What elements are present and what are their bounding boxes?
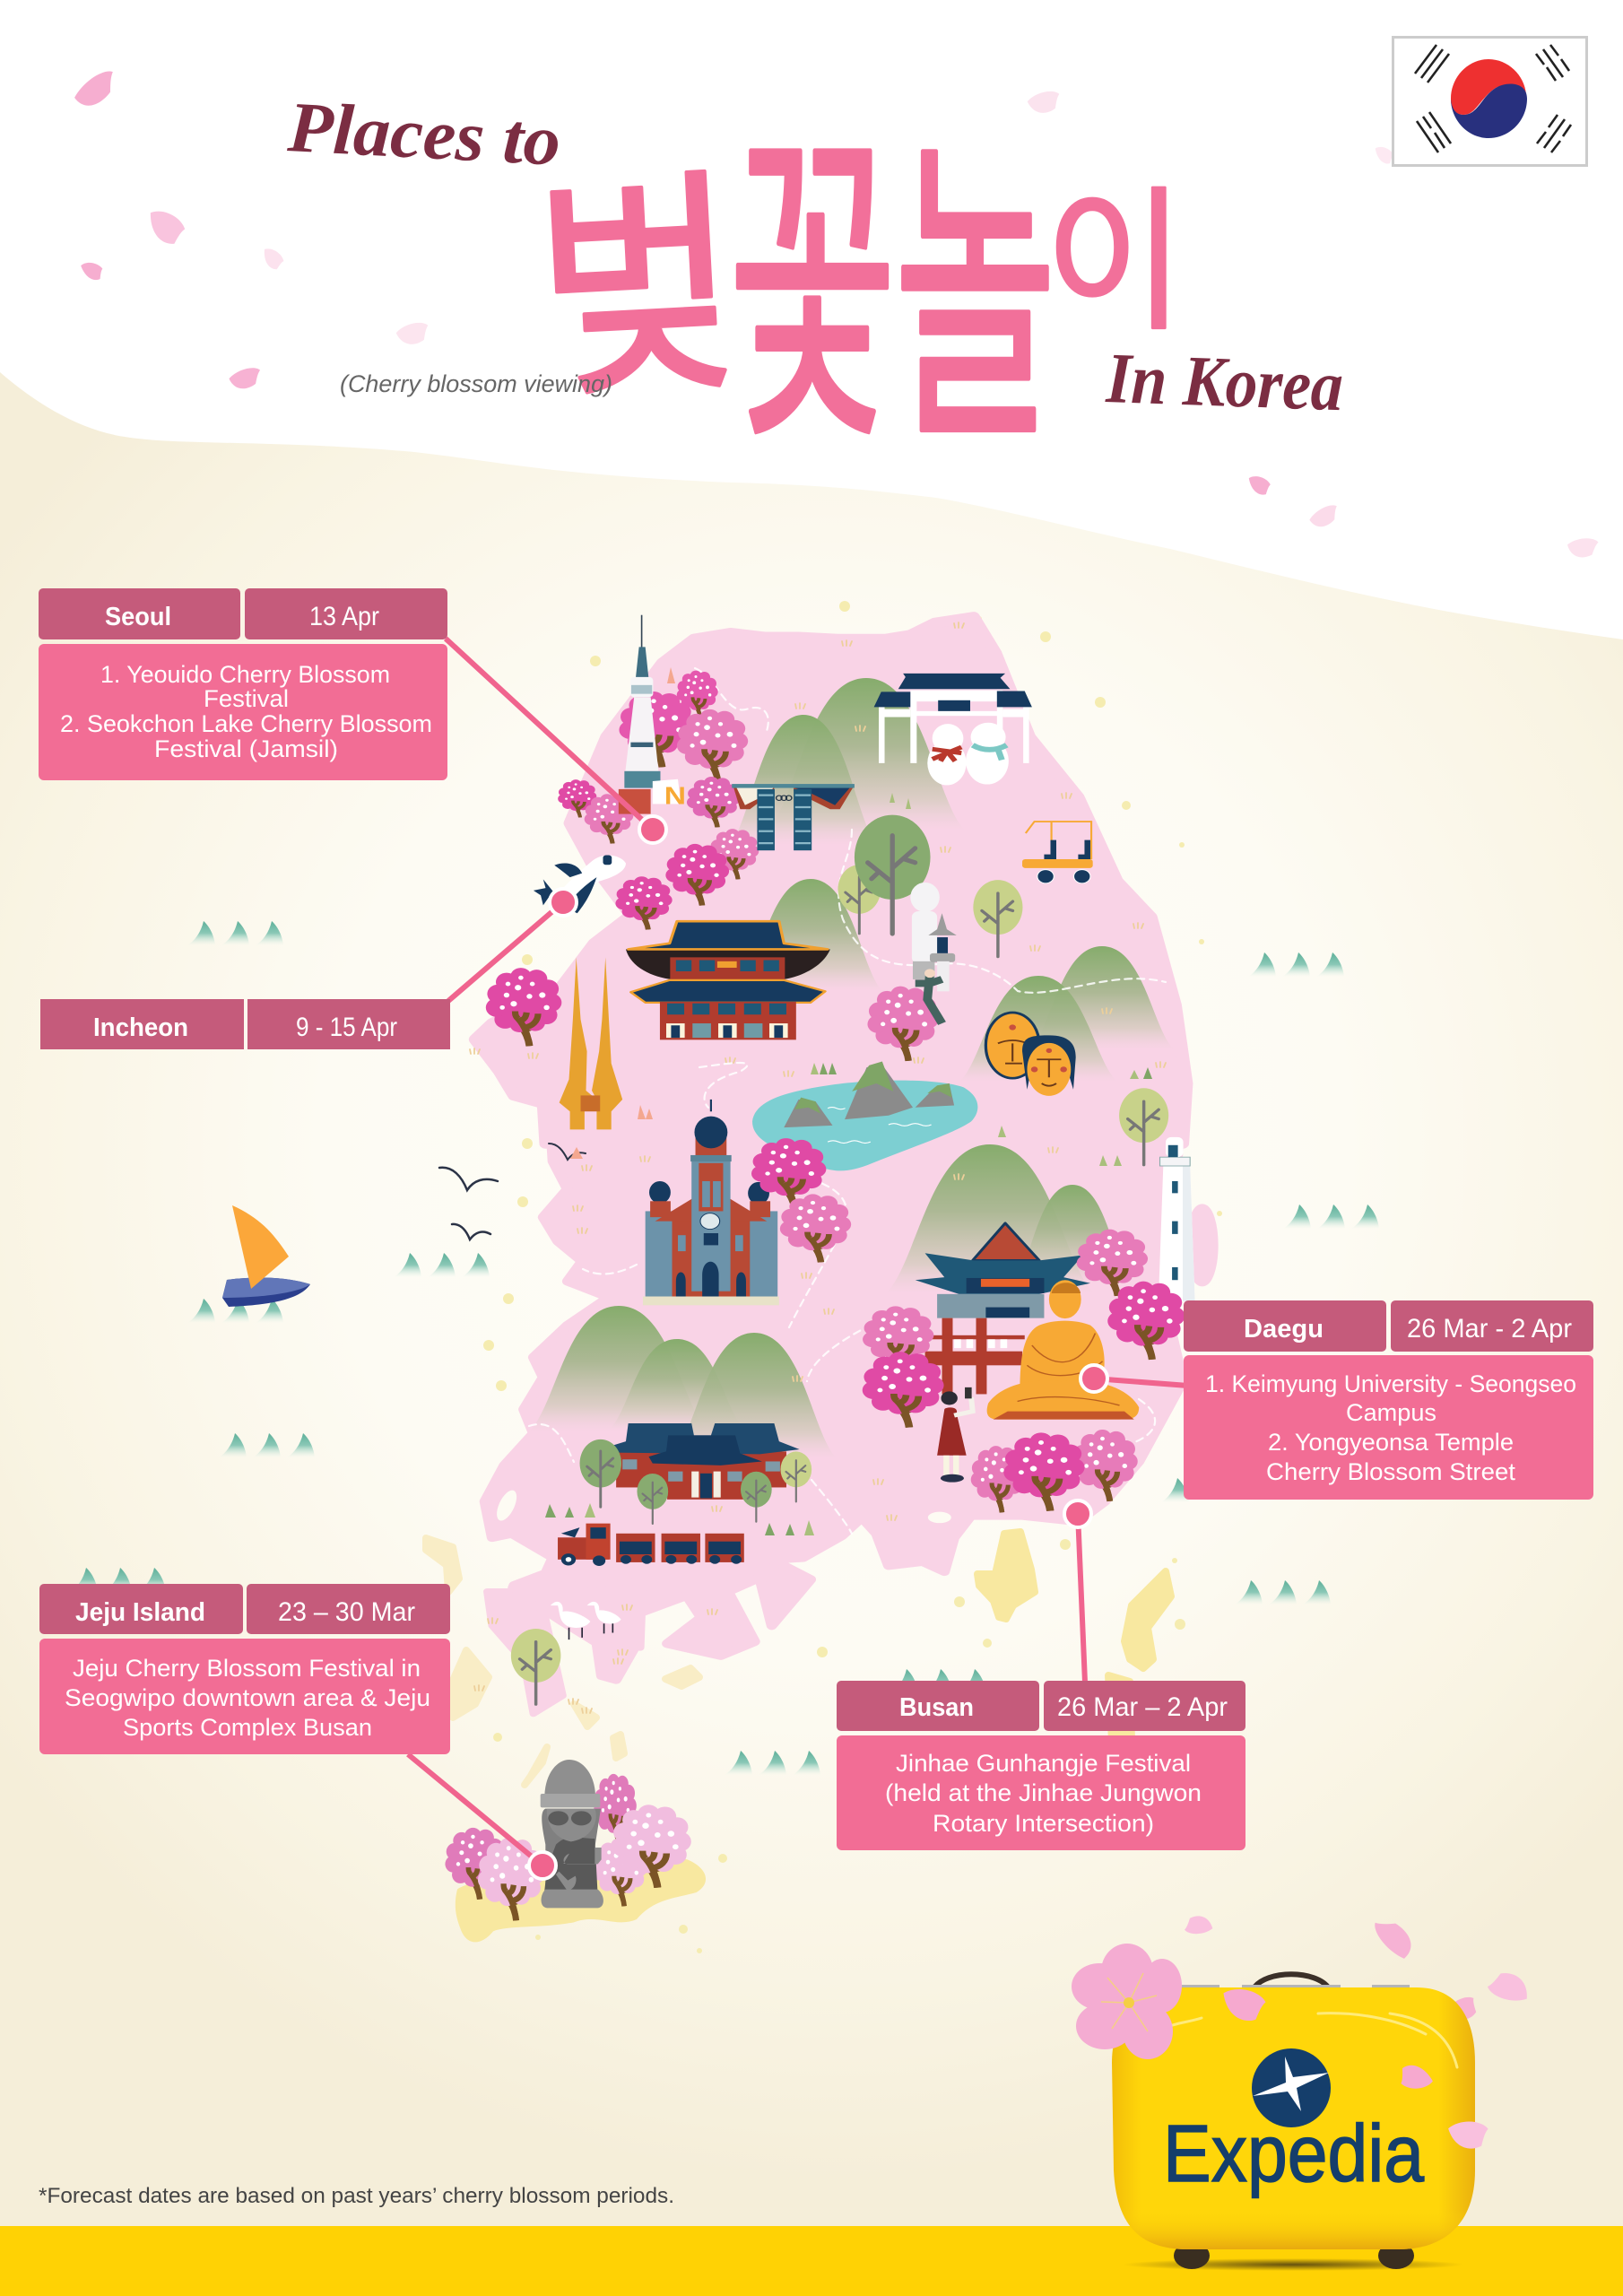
green trees <box>838 815 1168 1165</box>
map of South Korea <box>475 617 1186 1144</box>
icon: Olympic gate <box>732 784 855 850</box>
yellow island shapes <box>426 1532 1171 1785</box>
icon: hanok complex with trees <box>580 1423 812 1524</box>
panel: Seoul <box>39 588 447 780</box>
title: Korean headline: 이 <box>1045 136 1185 361</box>
panel: Daegu <box>1184 1300 1593 1500</box>
icon: gate with snowmen <box>874 674 1032 785</box>
scattered yellow dots <box>483 601 1222 1953</box>
map: coastal islets <box>487 1207 1214 1714</box>
title: Places to: Places to <box>285 88 562 181</box>
connector lines <box>408 639 1188 1866</box>
panel: Seoul: Festival <box>204 685 289 712</box>
panel: Busan: Rotary Intersection) <box>933 1810 1154 1837</box>
subtitle: Cherry blossom viewing: (Cherry blossom viewing) <box>340 370 612 397</box>
panel: Daegu: Cherry Blossom Street <box>1266 1458 1515 1485</box>
panel: Jeju Island <box>39 1584 450 1754</box>
icon: seagulls <box>439 1144 586 1239</box>
decorative sea waves <box>70 921 1379 1775</box>
small triangles on map <box>545 667 1152 1535</box>
icon: stone Buddha and pagoda <box>910 883 957 1023</box>
icon: train <box>558 1524 744 1566</box>
panel: Seoul: 2. Seokchon Lake Cherry Blossom <box>60 710 432 737</box>
icon: traditional masks <box>985 1013 1076 1096</box>
panel: Daegu: Campus <box>1346 1399 1436 1426</box>
panel: Jeju Island: Jeju Cherry Blossom Festival in <box>73 1655 421 1682</box>
panel: Daegu: 2. Yongyeonsa Temple <box>1268 1429 1514 1456</box>
Jeju Island land <box>445 1760 706 1942</box>
bottom yellow bar <box>0 2226 1623 2296</box>
icon: tandem rail bike <box>1022 822 1093 883</box>
lake with rocky islets <box>752 1061 977 1170</box>
icon: South Korean flag <box>1393 38 1587 165</box>
icon: cherry blossom flower and petals on suitcase <box>1072 1910 1528 2156</box>
dashed routes <box>529 668 1166 1534</box>
icon: cathedral <box>643 1100 779 1305</box>
panel: Busan: (held at the Jinhae Jungwon <box>885 1779 1202 1806</box>
icon: Expedia globe <box>1252 2048 1331 2127</box>
icon: N Seoul Tower <box>619 615 686 814</box>
petal behind suitcase <box>1446 1990 1481 2026</box>
panel: Busan: 26 Mar – 2 Apr <box>1057 1692 1228 1722</box>
map: northern landmass <box>475 617 1186 1144</box>
panel: Jeju Island: Jeju Island <box>75 1598 205 1627</box>
small peach triangle <box>570 1147 583 1159</box>
panel: Jeju Island: 23 – 30 Mar <box>278 1597 415 1627</box>
panel: Busan: Jinhae Gunhangje Festival <box>896 1750 1191 1777</box>
icon: lighthouse <box>1159 1137 1195 1301</box>
mountains <box>529 678 1174 1458</box>
panel: Jeju Island: Seogwipo downtown area & Jeju <box>65 1684 430 1711</box>
title: Korean headline: 벚 <box>526 91 746 446</box>
Expedia wordmark: Expedia <box>1163 2109 1425 2199</box>
icon: white geese <box>551 1602 621 1639</box>
suitcase with Expedia logo <box>1112 1974 1475 2271</box>
title: Korean headline: 놀 <box>894 42 1056 500</box>
panel: Jeju Island: Sports Complex Busan <box>123 1714 372 1741</box>
panel: Incheon <box>40 999 450 1049</box>
panel: Seoul: 1. Yeouido Cherry Blossom <box>100 661 390 688</box>
panel: Incheon: Incheon <box>93 1013 188 1042</box>
panel: Daegu: 26 Mar - 2 Apr <box>1407 1314 1572 1344</box>
footnote: *Forecast dates are based on past years’ cherry blossom periods. <box>39 2184 674 2208</box>
icon: twin golden spires <box>560 957 622 1129</box>
icon: two-tier palace <box>626 921 830 1039</box>
panel: Busan <box>837 1681 1245 1850</box>
blossom trees: north <box>486 671 939 1061</box>
icon: seated golden Buddha <box>987 1280 1139 1420</box>
blossom trees: Jeju <box>445 1774 691 1920</box>
map: coastline bays <box>493 1488 951 1523</box>
blossom trees: central and south <box>751 1138 1185 1427</box>
blossom tree grove: Busan <box>971 1430 1138 1512</box>
icon: tourist taking photo <box>937 1387 973 1483</box>
panel: Seoul: Festival (Jamsil) <box>154 735 338 762</box>
panel: Seoul: 13 Apr <box>309 602 379 631</box>
title: In Korea: In Korea <box>1104 339 1344 426</box>
icon: temple pavilion <box>916 1223 1090 1394</box>
location pins <box>529 816 1107 1879</box>
map: southern landmass <box>485 1121 1183 1680</box>
grass tufts <box>470 622 1166 1713</box>
icon: sailboat <box>222 1205 310 1307</box>
icon: dol hareubang statue <box>541 1760 603 1908</box>
panel: Incheon: 9 - 15 Apr <box>296 1013 397 1042</box>
panel: Daegu: Daegu <box>1244 1315 1324 1344</box>
falling petals: header <box>74 62 1602 563</box>
icon: N Seoul Tower: N <box>664 781 686 810</box>
title: Korean headline <box>526 31 1185 502</box>
title: Korean headline: 꽃 <box>728 31 898 502</box>
panel: Seoul: Seoul <box>105 603 171 631</box>
panel: Daegu: 1. Keimyung University - Seongseo <box>1205 1370 1576 1397</box>
icon: airplane at Incheon <box>534 856 626 913</box>
panel: Busan: Busan <box>899 1693 974 1722</box>
white header swoosh <box>0 0 1623 639</box>
